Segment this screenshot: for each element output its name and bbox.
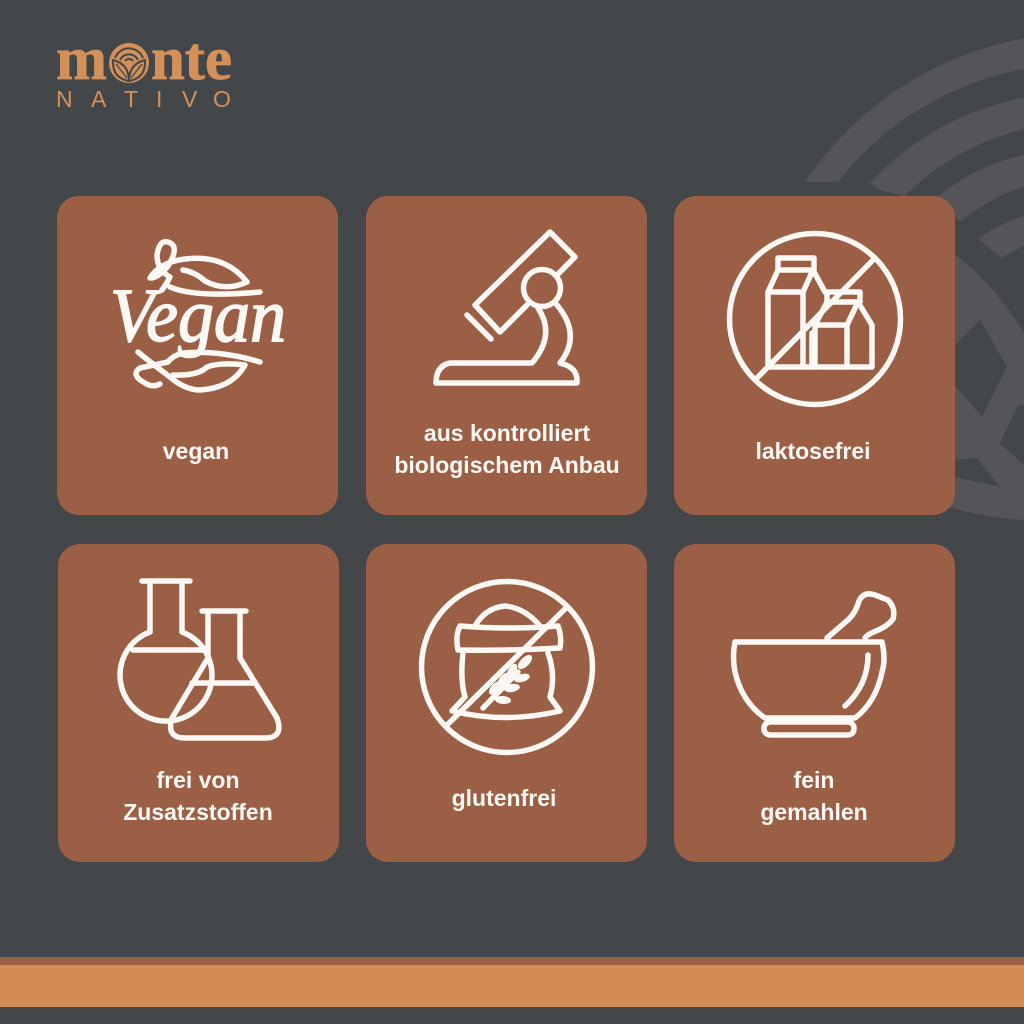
label: gluten free: glutenfrei (452, 785, 556, 811)
icon: milk cartons crossed out (730, 234, 900, 404)
label: organic farming: biologischem Anbau (394, 452, 620, 478)
watermark: logo arcs and leaf (805, 33, 1024, 520)
icon: flasks (120, 581, 279, 738)
label: finely ground: fein (794, 767, 834, 793)
panel: lactose free (674, 196, 955, 515)
label: no additives: Zusatzstoffen (123, 799, 273, 825)
icon: microscope (436, 232, 577, 383)
label: finely ground: gemahlen (760, 799, 868, 825)
icon: mortar and pestle (734, 594, 894, 735)
logo wordmark: nativo: NATIVO (56, 86, 231, 112)
logo wordmark: nte: nte (151, 26, 232, 93)
panel: vegan (57, 196, 338, 515)
icon: vegan lettering: Vegan (110, 274, 286, 358)
label: lactose free: laktosefrei (755, 438, 871, 464)
label: no additives: frei von (156, 767, 240, 793)
panel: finely ground (674, 544, 955, 862)
label: organic farming: aus kontrolliert (424, 420, 590, 446)
panel: gluten free (366, 544, 647, 862)
label: vegan: vegan (163, 438, 229, 464)
logo (56, 26, 232, 112)
footer band (0, 957, 1024, 1007)
logo emblem (109, 43, 149, 83)
icon: vegan lettering (110, 242, 286, 390)
panel: organic farming (366, 196, 647, 515)
icon: grain sack crossed out (422, 582, 592, 752)
panel: no additives (58, 544, 339, 862)
logo wordmark: m: m (56, 26, 107, 93)
